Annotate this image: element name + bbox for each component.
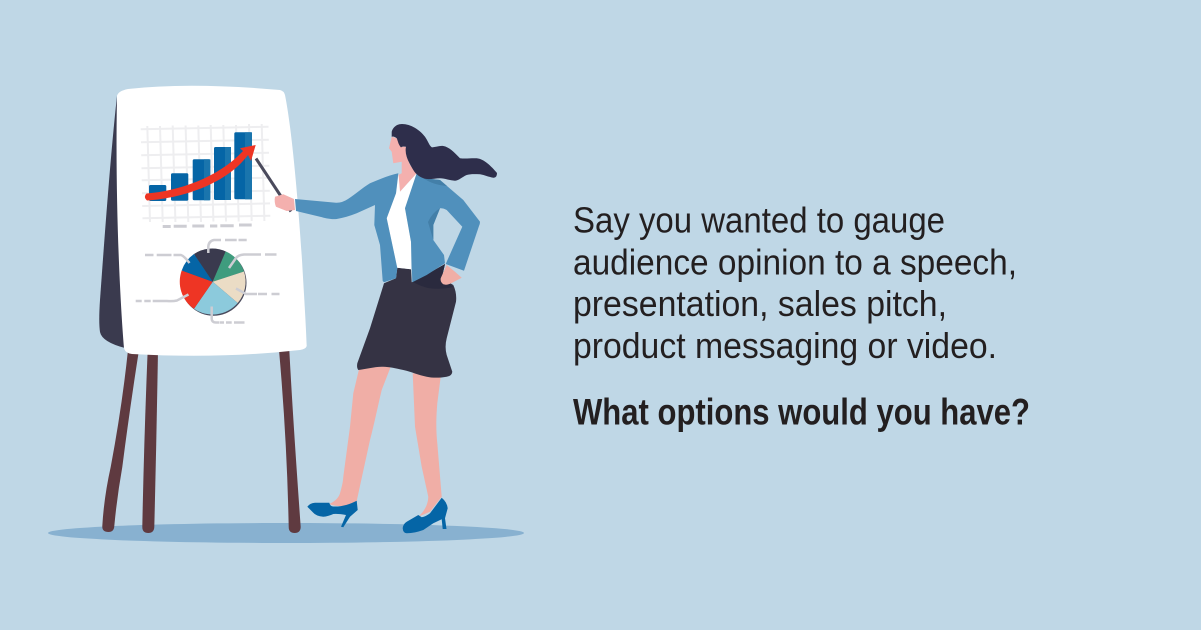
face and neck — [389, 137, 417, 192]
body text block: Say you wanted to gauge — [573, 200, 945, 240]
body text block: audience opinion to a speech, — [573, 242, 1017, 282]
chart axis label dashes — [163, 225, 252, 226]
front leg — [413, 373, 442, 517]
skirt — [357, 264, 456, 378]
back leg — [329, 366, 391, 506]
back shoe — [307, 501, 358, 527]
easel back panel — [99, 96, 130, 348]
white blouse — [387, 173, 417, 269]
red growth arrow — [145, 145, 256, 200]
bold question: What options would you have? — [573, 392, 1030, 432]
jacket left panel and pointing arm — [295, 173, 398, 282]
easel with chart board — [99, 86, 307, 533]
pointer stick — [256, 158, 291, 212]
pie chart callout dashes — [136, 240, 280, 322]
flowing hair — [392, 124, 497, 181]
hand on hip — [441, 265, 462, 285]
waist shadow — [413, 264, 453, 289]
front shoe — [403, 498, 448, 533]
chart grid — [141, 124, 270, 222]
body text block: product messaging or video. — [573, 325, 997, 366]
body text block: presentation, sales pitch, — [573, 283, 947, 324]
pointing hand — [275, 194, 295, 211]
bar chart — [149, 132, 252, 201]
white flip-chart board — [117, 86, 307, 356]
body text block — [573, 200, 1017, 366]
easel legs — [102, 350, 301, 533]
jacket shadows — [423, 178, 447, 240]
ground shadow — [48, 523, 524, 543]
presenter woman — [256, 124, 497, 533]
pie chart — [180, 249, 246, 316]
jacket right panel and bent arm — [405, 173, 480, 282]
